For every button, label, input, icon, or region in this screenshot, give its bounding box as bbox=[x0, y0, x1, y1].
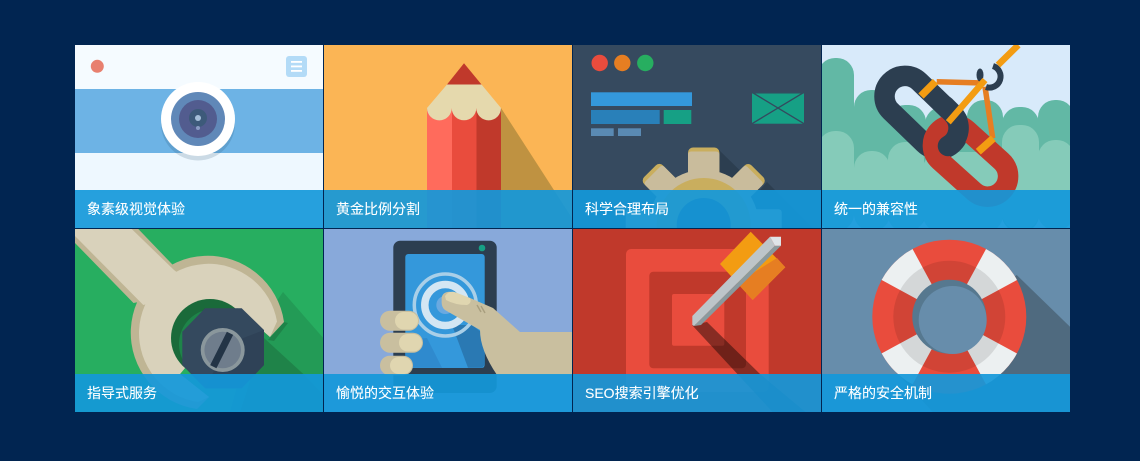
caption bbox=[324, 190, 572, 228]
caption bbox=[573, 374, 821, 412]
icon: life ring bbox=[872, 240, 1026, 394]
caption: 指导式服务 bbox=[87, 385, 157, 401]
icon: target squares bbox=[626, 249, 769, 374]
caption bbox=[822, 190, 1070, 228]
icon: pencil bbox=[427, 63, 501, 228]
icon: hand bbox=[380, 292, 572, 375]
layout bars bbox=[591, 92, 692, 136]
caption bbox=[75, 374, 323, 412]
caption: 黄金比例分割 bbox=[336, 201, 420, 217]
icon: hex bolt bbox=[182, 308, 264, 388]
caption bbox=[573, 190, 821, 228]
icon: envelope bbox=[752, 92, 804, 124]
caption: 统一的兼容性 bbox=[834, 201, 918, 217]
caption bbox=[75, 190, 323, 228]
caption: SEO搜索引擎优化 bbox=[585, 385, 699, 401]
panel: SEO bbox=[573, 229, 821, 420]
icon: pin with flag bbox=[692, 232, 785, 326]
clouds bbox=[818, 58, 1074, 232]
panel: scientific layout bbox=[573, 45, 821, 228]
panel: guided service bbox=[75, 229, 340, 412]
caption: 象素级视觉体验 bbox=[87, 201, 185, 217]
panel: delightful interaction bbox=[324, 229, 572, 412]
panel: strict security bbox=[822, 229, 1070, 420]
panel: golden ratio bbox=[324, 45, 572, 228]
caption: 严格的安全机制 bbox=[834, 385, 932, 401]
icon: camera lens bbox=[161, 82, 235, 160]
icon: wrench bbox=[75, 229, 284, 409]
caption bbox=[822, 374, 1070, 412]
panel: compatibility bbox=[818, 45, 1074, 232]
panel: pixel-level visual experience bbox=[75, 45, 323, 228]
icon: menu button bbox=[286, 56, 307, 77]
icon: gear bbox=[626, 148, 782, 228]
icon: phone bbox=[393, 241, 497, 393]
caption: 愉悦的交互体验 bbox=[336, 385, 434, 401]
icon: chain links bbox=[876, 45, 1018, 205]
caption: 科学合理布局 bbox=[585, 201, 669, 217]
caption bbox=[324, 374, 572, 412]
